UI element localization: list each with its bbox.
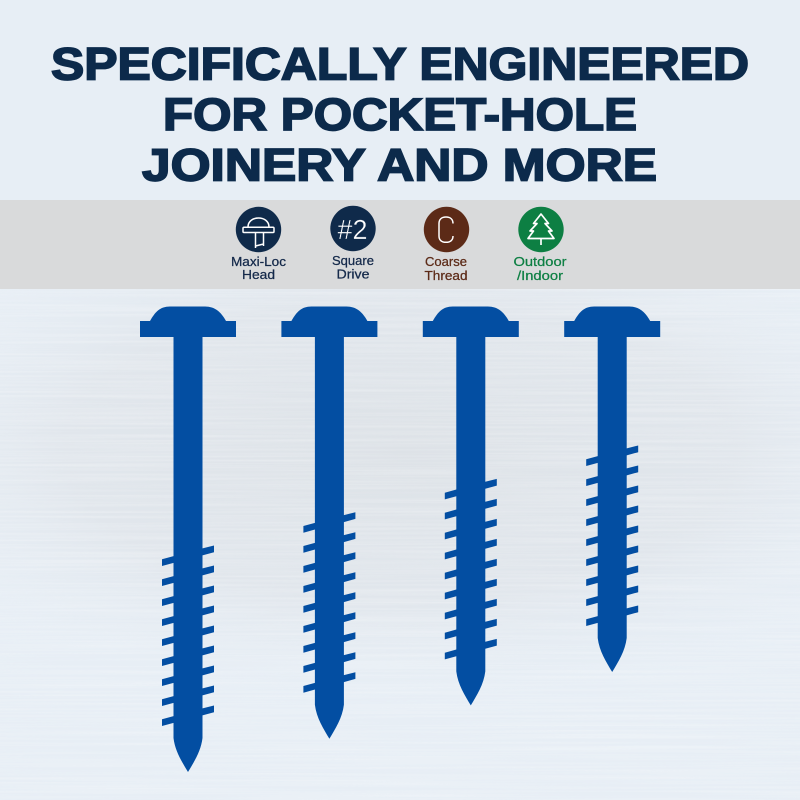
feature: Outdoor/Indoor [514,207,566,283]
screw 2 [281,306,377,739]
feature: Coarse Thread [424,207,469,283]
title [51,38,749,190]
feature: Square Drive: Drive [336,268,370,282]
feature: Outdoor/Indoor: Outdoor [514,255,566,269]
feature: Maxi-Loc Head: Maxi-Loc [231,255,286,269]
feature: Outdoor/Indoor: /Indoor [517,269,563,283]
feature: Coarse Thread: Coarse [425,255,467,269]
feature: Maxi-Loc Head [231,207,286,282]
panel: feature band [0,200,800,289]
title: SPECIFICALLY ENGINEERED [51,38,749,90]
screw 3 [423,306,519,705]
screw 1 [140,306,236,772]
title: FOR POCKET-HOLE [163,89,637,140]
feature: Square Drive [330,206,376,282]
title: JOINERY AND MORE [142,140,657,190]
feature: Maxi-Loc Head: Head [242,268,275,282]
feature: Square Drive: #2 [338,214,368,245]
feature: Coarse Thread: Thread [424,269,468,283]
screw 4 [564,306,660,672]
feature: Square Drive: Square [332,254,374,268]
